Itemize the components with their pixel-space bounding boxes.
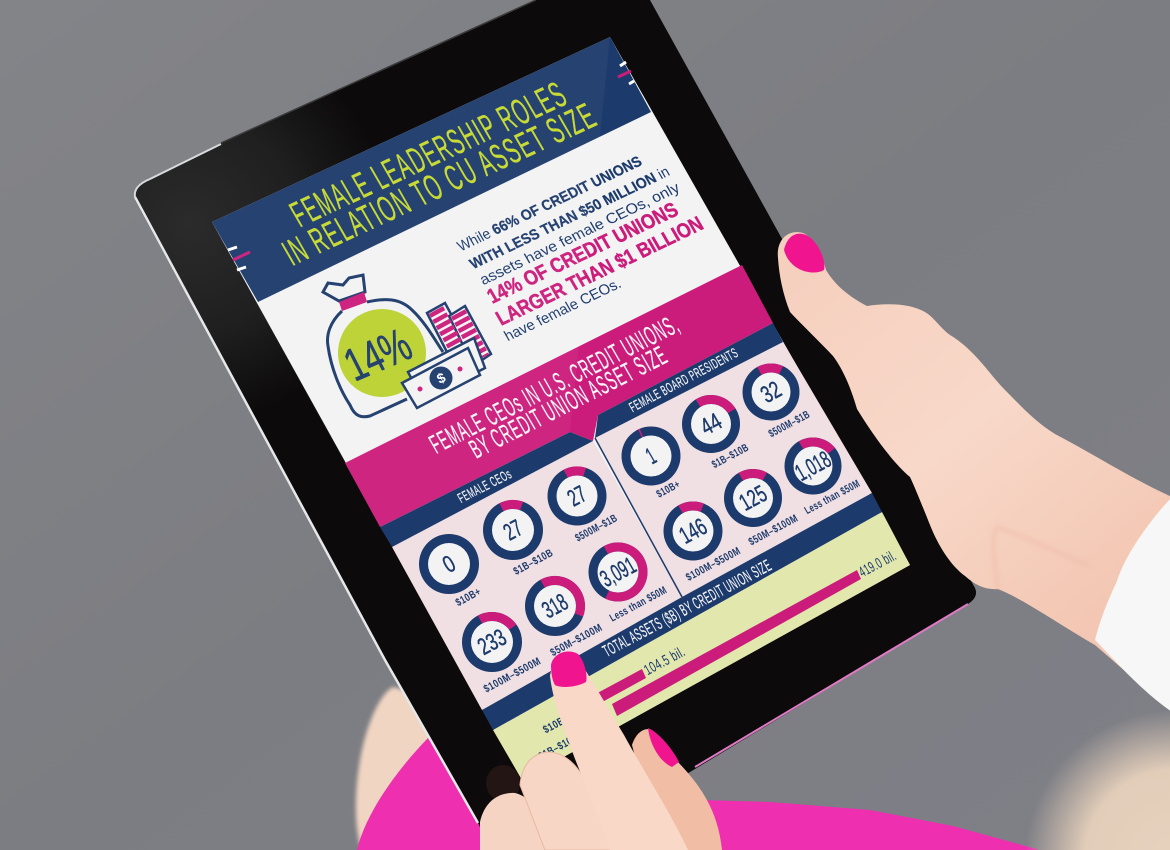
donut: 32 (738, 359, 804, 425)
CEO heading band (380, 432, 593, 547)
bar: 104.5 bil (590, 669, 646, 706)
index finger (550, 659, 688, 850)
donut: 27 (479, 496, 547, 564)
board heading: FEMALE BOARD PRESIDENTS (626, 344, 741, 415)
bar label: $1B–$10B: $1B–$10B (537, 732, 580, 763)
donut: 146: 146 (675, 513, 712, 550)
bar label: $10B+: $10B+ (541, 713, 572, 736)
donut: 125 (720, 465, 786, 531)
bag outline (328, 300, 443, 417)
bag neck band (339, 292, 367, 311)
board asset labels: $10B+ (654, 478, 683, 500)
CEO asset labels: $10B+ (454, 586, 483, 609)
heading (276, 74, 604, 273)
board asset labels (654, 409, 862, 584)
assets background (493, 512, 910, 780)
intro text block: WITH LESS THAN $50 MILLION in (467, 163, 673, 273)
panel: female board presidents (595, 323, 872, 597)
donut: 146 (659, 497, 727, 565)
board asset labels: $50M–$100M (747, 513, 800, 548)
board asset labels: $100M–$500M (684, 545, 743, 584)
blurred knee (356, 687, 470, 845)
CEO asset labels: $50M–$100M (548, 622, 605, 659)
header decoration right (618, 62, 634, 84)
donut: 318: 318 (537, 589, 573, 624)
donut: 44: 44 (696, 408, 727, 441)
board asset labels: Less than $50M (803, 478, 862, 517)
thumb nail (648, 728, 679, 767)
icon: money bag with 14% (323, 275, 443, 417)
donut: 0: 0 (438, 550, 460, 579)
nail (784, 234, 824, 273)
intro text block: While 66% OF CREDIT UNIONS (454, 153, 645, 255)
index nail (551, 651, 587, 687)
icon: dollar bills: $ (434, 369, 448, 387)
board asset labels: $500M–$1B (767, 409, 812, 440)
icon: coin stacks (427, 303, 491, 366)
donut: 1: 1 (641, 443, 661, 470)
pink title band (345, 265, 773, 527)
donut: 125: 125 (735, 480, 772, 517)
bag tie (323, 275, 365, 301)
CEO asset labels: $500M–$1B (573, 512, 620, 544)
middle finger (520, 752, 612, 850)
infographic screen: FEMALE CEOs IN U.S. CREDIT UNIONS, (424, 309, 685, 459)
donut: 1,018 (780, 433, 846, 499)
ring finger (480, 793, 548, 850)
donut: 233: 233 (473, 624, 511, 661)
CEO heading: FEMALE CEOs (455, 466, 514, 506)
intro text block (454, 153, 707, 345)
pink skirt (357, 738, 1040, 850)
hand shape (778, 232, 1170, 712)
panel: total assets bar chart (482, 493, 910, 780)
blurred hair (1020, 700, 1170, 850)
donut: 1,018: 1,018 (791, 446, 836, 487)
value: 419.0 bil: 419.0 bil. (856, 547, 900, 581)
14% label: 14% (336, 319, 420, 391)
CEO asset labels: $1B–$10B (512, 547, 555, 578)
panel: total assets bar chart: TOTAL ASSETS ($B) BY CREDIT UNION SIZE (599, 556, 775, 661)
header decoration left (228, 247, 250, 270)
donut: 27: 27 (499, 515, 528, 546)
value: 104.5 bil: 104.5 bil. (641, 643, 688, 679)
header band (212, 37, 651, 302)
CEO asset labels: Less than $50M (608, 584, 669, 624)
tablet body (135, 0, 976, 850)
panel: female CEOs (380, 432, 682, 710)
CEO asset labels (454, 512, 669, 695)
infographic screen (212, 37, 910, 780)
donut: 44 (677, 390, 745, 458)
sleeve (1095, 497, 1170, 712)
assets heading band (482, 493, 882, 730)
bar: 419.0 bil (612, 570, 861, 716)
vertical divider between panels (595, 438, 682, 597)
donut: 32: 32 (756, 376, 786, 409)
intro text block: assets have female CEOs, only (477, 179, 683, 289)
donut: 318 (520, 571, 590, 641)
green circle (338, 309, 426, 397)
donut: 0 (419, 534, 479, 594)
board heading band (595, 323, 783, 438)
thumb (632, 729, 722, 850)
CEO asset labels: $100M–$500M (482, 655, 543, 695)
screen base (212, 37, 910, 780)
intro text block: 14% OF CREDIT UNIONS (483, 198, 682, 308)
wrist crease (993, 527, 1090, 589)
donut: 27 second: 27 (563, 481, 592, 512)
icon: dollar bills (402, 338, 485, 408)
screen reflection (212, 37, 610, 527)
section heading: BY CREDIT UNION ASSET SIZE (464, 340, 673, 464)
right hand (778, 232, 1170, 712)
left hand fingers (480, 651, 722, 850)
donut: 1 (618, 423, 684, 489)
intro text block: have female CEOs. (501, 275, 624, 345)
donut: 3,091: 3,091 (596, 552, 641, 593)
donut: 233 (458, 608, 526, 676)
donut: 3,091 (584, 538, 652, 606)
section heading (424, 309, 685, 464)
donut: 27 second (543, 462, 611, 530)
board asset labels: $1B–$10B (710, 442, 751, 471)
intro text block: LARGER THAN $1 BILLION (492, 213, 707, 330)
